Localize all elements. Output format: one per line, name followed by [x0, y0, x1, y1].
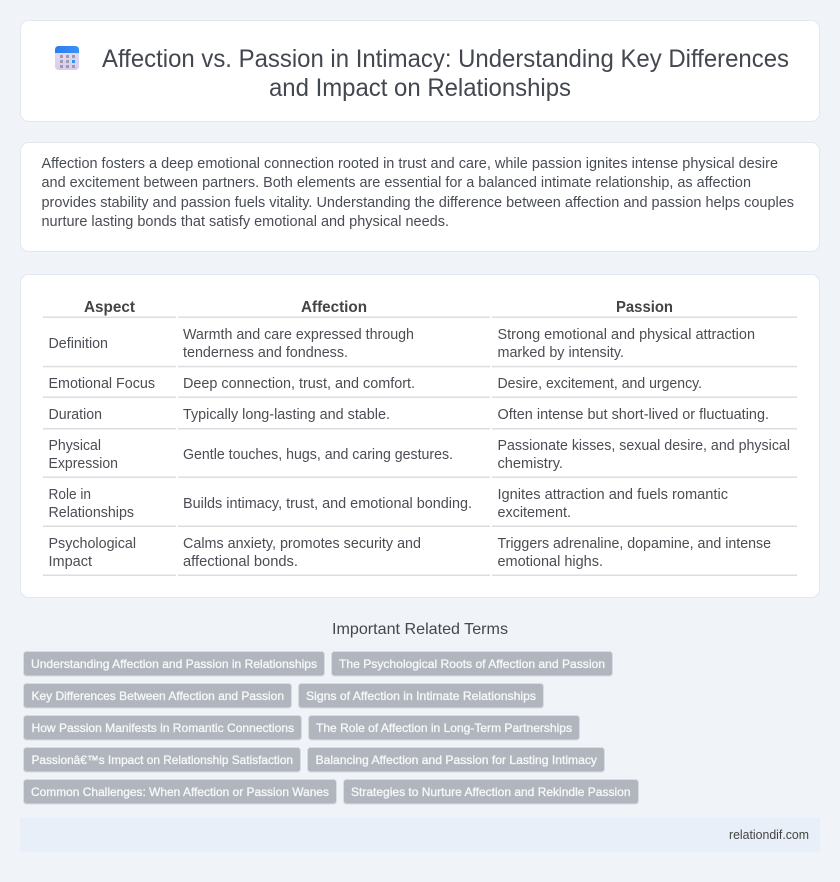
row: physical expression: Passionate kisses, sexual desire, and physical	[498, 437, 790, 454]
panel: header	[20, 20, 820, 122]
table header: Passion	[616, 299, 673, 316]
table header: Affection	[301, 299, 367, 316]
row: psychological impact: Impact	[48, 553, 93, 570]
row: definition: Warmth and care expressed through	[183, 326, 414, 343]
footer: relationdif.com	[729, 827, 809, 842]
row: definition	[48, 326, 755, 361]
row: psychological impact	[48, 535, 771, 570]
row: definition: tenderness and fondness.	[183, 344, 348, 361]
row: duration: Often intense but short-lived or fluctuating.	[498, 406, 769, 423]
row: role in relationships: Ignites attraction and fuels romantic	[498, 486, 728, 503]
panel: related term tags: The Psychological Roots of Affection and Passion	[339, 657, 605, 671]
panel: related term tags: Common Challenges: When Affection or Passion Wanes	[31, 785, 329, 799]
table header: Aspect	[84, 299, 136, 316]
table header	[84, 299, 673, 316]
row: duration: Typically long-lasting and stable.	[183, 406, 390, 423]
title	[102, 45, 789, 102]
panel: related term tags: The Role of Affection in Long-Term Partnerships	[316, 721, 572, 735]
panel: comparison table	[20, 274, 820, 598]
row: role in relationships	[48, 486, 728, 521]
footer	[20, 818, 820, 852]
row: role in relationships: Relationships	[48, 504, 134, 521]
row: physical expression: chemistry.	[498, 455, 563, 472]
row: psychological impact: Calms anxiety, promotes security and	[183, 535, 421, 552]
panel: related term tags: Balancing Affection and Passion for Lasting Intimacy	[316, 753, 597, 767]
row: physical expression: Physical	[48, 437, 101, 454]
panel: related term tags: Understanding Affection and Passion in Relationships	[31, 657, 317, 671]
row: psychological impact: emotional highs.	[498, 553, 603, 570]
row: definition: Strong emotional and physical attraction	[498, 326, 755, 343]
panel: intro paragraph: provides stability and passion fuels vitality. Understanding the difference between affection and passion helps couples	[42, 194, 794, 211]
row: definition: marked by intensity.	[498, 344, 624, 361]
row: physical expression: Expression	[48, 455, 118, 472]
row: physical expression: Gentle touches, hugs, and caring gestures.	[183, 446, 453, 463]
row: emotional focus: Emotional Focus	[48, 375, 155, 392]
row: emotional focus	[48, 375, 702, 392]
panel: related term tags: Signs of Affection in Intimate Relationships	[306, 689, 536, 703]
row: physical expression	[48, 437, 790, 472]
title: Affection vs. Passion in Intimacy: Understanding Key Differences	[102, 45, 789, 73]
row: definition: Definition	[48, 335, 108, 352]
row: duration	[48, 406, 769, 423]
heading: related terms: Important Related Terms	[332, 621, 508, 638]
row: psychological impact: Triggers adrenaline, dopamine, and intense	[498, 535, 771, 552]
icon: calendar	[55, 46, 79, 70]
panel: related term tags	[24, 652, 638, 804]
panel: related term tags: How Passion Manifests in Romantic Connections	[32, 721, 294, 735]
panel: intro paragraph: nurture lasting bonds that satisfy emotional and physical needs.	[42, 213, 449, 230]
title: and Impact on Relationships	[269, 74, 571, 102]
row: psychological impact: Psychological	[48, 535, 136, 552]
row: duration: Duration	[48, 406, 102, 423]
panel: related term tags: Strategies to Nurture Affection and Rekindle Passion	[351, 785, 630, 799]
row: emotional focus: Desire, excitement, and urgency.	[498, 375, 702, 392]
panel: intro paragraph	[20, 142, 820, 252]
row: role in relationships: Builds intimacy, trust, and emotional bonding.	[183, 495, 472, 512]
row: psychological impact: affectional bonds.	[183, 553, 298, 570]
row: role in relationships: excitement.	[498, 504, 571, 521]
panel: intro paragraph: Affection fosters a deep emotional connection rooted in trust and care, while passion ignites intense physical desire	[42, 155, 778, 172]
panel: related term tags: Passionâ€™s Impact on Relationship Satisfaction	[32, 753, 293, 767]
row: emotional focus: Deep connection, trust, and comfort.	[183, 375, 415, 392]
panel: intro paragraph: and excitement between partners. Both elements are essential for a balanced intimate relationship, as affection	[42, 174, 751, 191]
panel: related term tags: Key Differences Between Affection and Passion	[32, 689, 284, 703]
row: role in relationships: Role in	[48, 486, 91, 503]
